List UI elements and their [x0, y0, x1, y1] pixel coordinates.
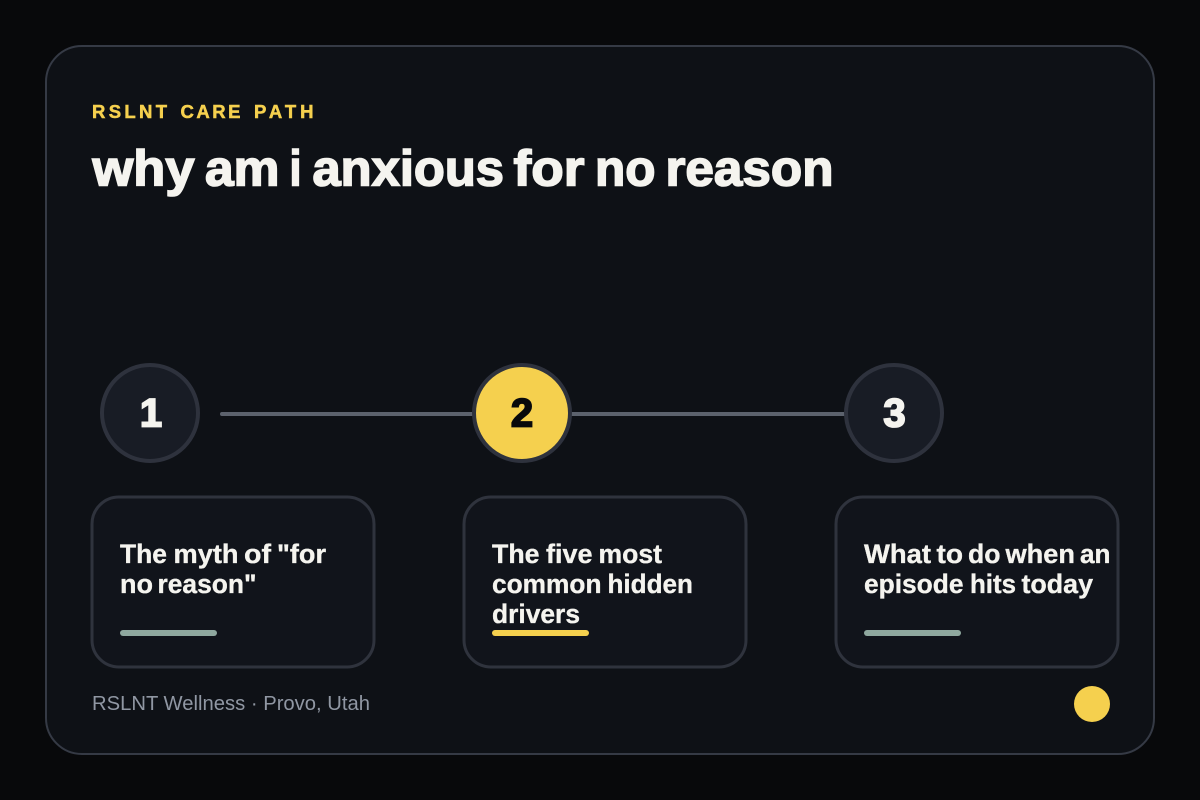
step 2 marker: [474, 365, 570, 461]
panel: step 3 card: [836, 497, 1118, 667]
step 1 text: no: [120, 569, 153, 599]
connector: step 1 to step 2: [220, 412, 476, 416]
step 2 accent bar: [492, 630, 589, 636]
title: reason: [666, 140, 834, 196]
step 3 text: [864, 539, 1110, 599]
step 3 text: do: [968, 539, 1000, 569]
step 3 accent bar: [864, 630, 961, 636]
step 1 text: of: [244, 539, 272, 569]
step 3 text: when: [1004, 539, 1075, 569]
step 1 text: [120, 539, 326, 599]
eyebrow label: PATH: [254, 101, 314, 122]
step 2 text: The: [492, 539, 540, 569]
step 3 text: What: [864, 539, 931, 569]
step 1 accent bar: [120, 630, 217, 636]
step 3 text: hits: [970, 569, 1016, 599]
eyebrow label: CARE: [180, 101, 240, 122]
step 3 marker: 3: [883, 392, 906, 436]
step 2 text: most: [598, 539, 662, 569]
step 1 text: reason": [158, 569, 256, 599]
footer text: RSLNT Wellness · Provo, Utah: [92, 693, 370, 715]
step 3 text: to: [936, 539, 963, 569]
step 2 text: five: [546, 539, 592, 569]
step 3 text: today: [1022, 569, 1093, 599]
title: for: [514, 140, 584, 196]
icon: yellow dot: [1074, 686, 1110, 722]
title: i: [290, 140, 302, 196]
panel: step 1 card: [92, 497, 374, 667]
step 2 marker: 2: [511, 392, 533, 436]
step 1 marker: [102, 365, 198, 461]
eyebrow label: [92, 101, 314, 122]
panel: step 2 card: [464, 497, 746, 667]
step 2 text: hidden: [608, 569, 693, 599]
step 1 marker: 1: [140, 392, 162, 436]
title: am: [205, 140, 280, 196]
step 1 text: myth: [174, 539, 238, 569]
connector: step 2 to step 3: [568, 412, 848, 416]
title: anxious: [312, 140, 504, 196]
step 2 text: [492, 539, 693, 629]
eyebrow label: RSLNT: [92, 101, 168, 122]
step 1 text: The: [120, 539, 167, 569]
step 1 text: "for: [277, 539, 326, 569]
step 3 text: episode: [864, 569, 964, 599]
step 3 marker: [846, 365, 942, 461]
title: no: [595, 140, 656, 196]
step 2 text: drivers: [492, 599, 580, 629]
title: [91, 140, 833, 196]
title: why: [91, 140, 195, 196]
step 2 text: common: [492, 569, 602, 599]
step 3 text: an: [1080, 539, 1110, 569]
